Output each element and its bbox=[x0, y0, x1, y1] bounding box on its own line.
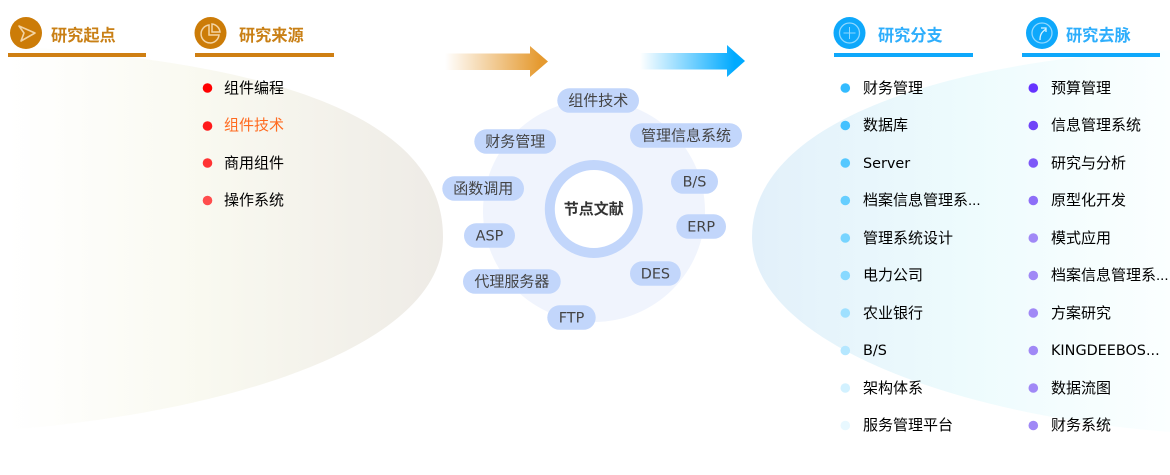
arrow: orange bbox=[445, 46, 548, 77]
list: 研究分支: 数据库 bbox=[863, 117, 908, 134]
pill: 代理服务器 bbox=[463, 269, 561, 294]
pill: FTP bbox=[547, 305, 596, 330]
list: 研究来源: 组件技术 bbox=[224, 117, 284, 134]
icon: circular arrow bbox=[1026, 17, 1058, 49]
list: 研究去脉 bbox=[1028, 79, 1169, 434]
list: 研究去脉: 方案研究 bbox=[1051, 304, 1111, 322]
heading text: 研究去脉 bbox=[1066, 26, 1131, 45]
right background blob bbox=[752, 50, 1170, 432]
list: 研究来源: 操作系统 bbox=[224, 192, 284, 209]
list: 研究分支: 管理系统设计 bbox=[863, 230, 953, 247]
pill: 函数调用: 函数调用 bbox=[453, 180, 513, 198]
pill: ASP bbox=[464, 223, 515, 248]
pill: ERP bbox=[676, 214, 726, 239]
list: 研究去脉: 预算管理 bbox=[1051, 79, 1111, 97]
header: 研究起点 bbox=[8, 17, 146, 57]
list: 研究分支 bbox=[840, 80, 981, 434]
center keyword diagram bbox=[442, 88, 742, 330]
heading text: 研究起点 bbox=[51, 26, 116, 45]
pill: 函数调用 bbox=[442, 176, 524, 201]
list: 研究去脉: 信息管理系统 bbox=[1051, 117, 1141, 134]
pill: 管理信息系统: 管理信息系统 bbox=[641, 128, 731, 144]
pill: 组件技术: 组件技术 bbox=[568, 92, 628, 110]
list: 研究分支: 服务管理平台 bbox=[863, 417, 953, 434]
list: 研究去脉: KINGDEEBOS... bbox=[1051, 343, 1160, 359]
pill: DES: DES bbox=[641, 266, 670, 282]
list: 研究分支: 农业银行 bbox=[863, 305, 923, 322]
pill: 财务管理 bbox=[474, 129, 556, 154]
icon: pie chart bbox=[194, 17, 226, 49]
pill: 管理信息系统 bbox=[630, 123, 742, 148]
arrow: blue bbox=[640, 45, 745, 77]
list: 研究来源 bbox=[203, 80, 284, 209]
list: 研究去脉: 档案信息管理系... bbox=[1051, 266, 1169, 284]
list: 研究分支: 财务管理 bbox=[863, 80, 923, 97]
list: 研究去脉: 财务系统 bbox=[1051, 417, 1111, 434]
center node bbox=[550, 165, 638, 253]
icon: plus circle bbox=[834, 17, 866, 49]
list: 研究去脉: 原型化开发 bbox=[1051, 192, 1126, 209]
list: 研究分支: 电力公司 bbox=[863, 267, 923, 284]
heading text: 研究分支 bbox=[878, 26, 943, 45]
pill: 代理服务器: 代理服务器 bbox=[474, 274, 549, 290]
pill: B/S bbox=[671, 169, 718, 194]
list: 研究来源: 组件编程 bbox=[224, 80, 284, 97]
list: 研究分支: Server bbox=[863, 156, 910, 172]
list: 研究分支: B/S bbox=[863, 343, 887, 359]
pill: FTP: FTP bbox=[559, 310, 585, 326]
list: 研究去脉: 模式应用 bbox=[1051, 229, 1111, 247]
heading text: 研究来源 bbox=[239, 26, 304, 45]
list: 研究来源: 商用组件 bbox=[224, 155, 284, 172]
list: 研究去脉: 数据流图 bbox=[1051, 380, 1111, 397]
pill: ASP: ASP bbox=[476, 228, 504, 244]
icon: send arrow bbox=[10, 17, 42, 49]
list: 研究分支: 档案信息管理系... bbox=[863, 191, 981, 209]
header: 研究分支 bbox=[834, 17, 973, 57]
list: 研究分支: 架构体系 bbox=[863, 380, 923, 397]
list: 研究去脉: 研究与分析 bbox=[1051, 155, 1126, 172]
pill: 财务管理: 财务管理 bbox=[485, 134, 545, 150]
pill: DES bbox=[630, 261, 681, 286]
center node: 节点文献 bbox=[564, 200, 624, 218]
pill: ERP: ERP bbox=[687, 220, 715, 236]
pill: 组件技术 bbox=[557, 88, 639, 113]
pill: B/S: B/S bbox=[683, 174, 706, 190]
left background blob bbox=[8, 46, 443, 430]
header: 研究去脉 bbox=[1022, 17, 1160, 57]
header: 研究来源 bbox=[194, 17, 334, 57]
